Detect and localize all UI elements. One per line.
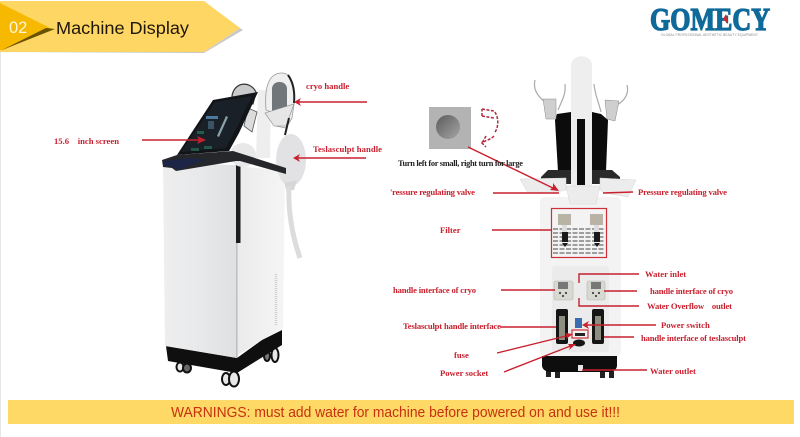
power switch, fuse and socket	[572, 318, 588, 346]
cryo interfaces	[554, 281, 605, 300]
wheels	[176, 348, 278, 386]
label: teslasculpt handle interface: Teslasculpt handle interface	[403, 321, 501, 331]
label: power socket: Power socket	[440, 368, 488, 378]
arrow: water overflow outlet	[579, 298, 639, 306]
label: fuse: fuse	[454, 350, 469, 360]
arrow: filter	[492, 229, 552, 231]
label: 15.6 inch screen: 15.6 inch screen	[54, 136, 119, 146]
logo: GOMECY: GOMECY	[650, 1, 770, 37]
label: pressure regulating valve right: Pressure regulating valve	[638, 187, 727, 197]
label: power switch: Power switch	[661, 320, 710, 330]
interface panel	[552, 266, 609, 352]
caption: valve direction: Turn left for small, right turn for large	[398, 159, 523, 168]
arrow: right pressure valve	[603, 192, 633, 193]
machine: rear view	[520, 56, 636, 378]
label: handle interface of cryo right: handle interface of cryo	[650, 286, 733, 296]
teslasculpt handle	[276, 134, 306, 258]
arrow: power switch	[582, 321, 656, 329]
arrow: cryo handle	[294, 98, 367, 106]
cabinet back	[540, 197, 621, 356]
label: handle interface of teslasculpt: handle interface of teslasculpt	[641, 333, 746, 343]
arrow: left pressure valve	[493, 192, 559, 194]
title banner	[0, 1, 243, 53]
arrow: Teslasculpt handle	[293, 154, 366, 162]
label: pressure regulating valve left: 'ressure regulating valve	[390, 187, 475, 197]
arrow: water outlet	[582, 369, 647, 371]
rear wheels	[546, 370, 614, 378]
label: Teslasculpt handle: Teslasculpt handle	[313, 144, 382, 154]
label: water overflow outlet: Water Overflow outlet	[647, 301, 732, 311]
logo: GOMECY: GLOBAL PROFESSIONAL AESTHETIC BEAUTY EQUIPMENT	[661, 33, 758, 37]
label: water outlet: Water outlet	[650, 366, 696, 376]
right hanger	[594, 84, 628, 121]
left hanger	[534, 80, 565, 119]
warning text: WARNINGS: must add water for machine before powered on and use it!!!	[171, 405, 620, 421]
heading: Machine Display	[56, 18, 189, 38]
warning bar	[8, 400, 794, 424]
label: cryo handle: cryo handle	[306, 81, 349, 91]
base	[166, 330, 282, 373]
machine: front three-quarter view	[162, 73, 306, 386]
arrow: water inlet	[579, 274, 639, 283]
label: water inlet: Water inlet	[645, 269, 686, 279]
base	[542, 356, 617, 372]
cabinet panels	[163, 163, 237, 358]
section number: 02	[9, 19, 27, 37]
teslasculpt interfaces	[556, 309, 604, 344]
rear handle and arm	[256, 90, 271, 158]
touch screen	[177, 92, 258, 155]
arrow: cryo interface left	[501, 289, 555, 291]
arrow: fuse	[497, 333, 573, 353]
console top	[162, 151, 286, 174]
arrow: knob to valve	[468, 147, 559, 191]
console shelf	[520, 178, 636, 204]
filter box	[552, 208, 606, 258]
arrow: teslasculpt interface right	[604, 336, 634, 338]
label: filter: Filter	[440, 225, 461, 235]
arrow: 15.6 inch screen	[142, 136, 206, 144]
arrow: power socket	[504, 344, 576, 372]
valve knob photo	[429, 107, 471, 149]
cryo handle	[265, 73, 294, 135]
white column	[571, 56, 592, 192]
arrow: cryo interface right	[604, 290, 637, 292]
label: handle interface of cryo left: handle interface of cryo	[393, 285, 476, 295]
icon: dashed turn arrows	[482, 109, 498, 147]
black back panels	[555, 112, 571, 172]
arrow: teslasculpt interface	[500, 326, 556, 328]
